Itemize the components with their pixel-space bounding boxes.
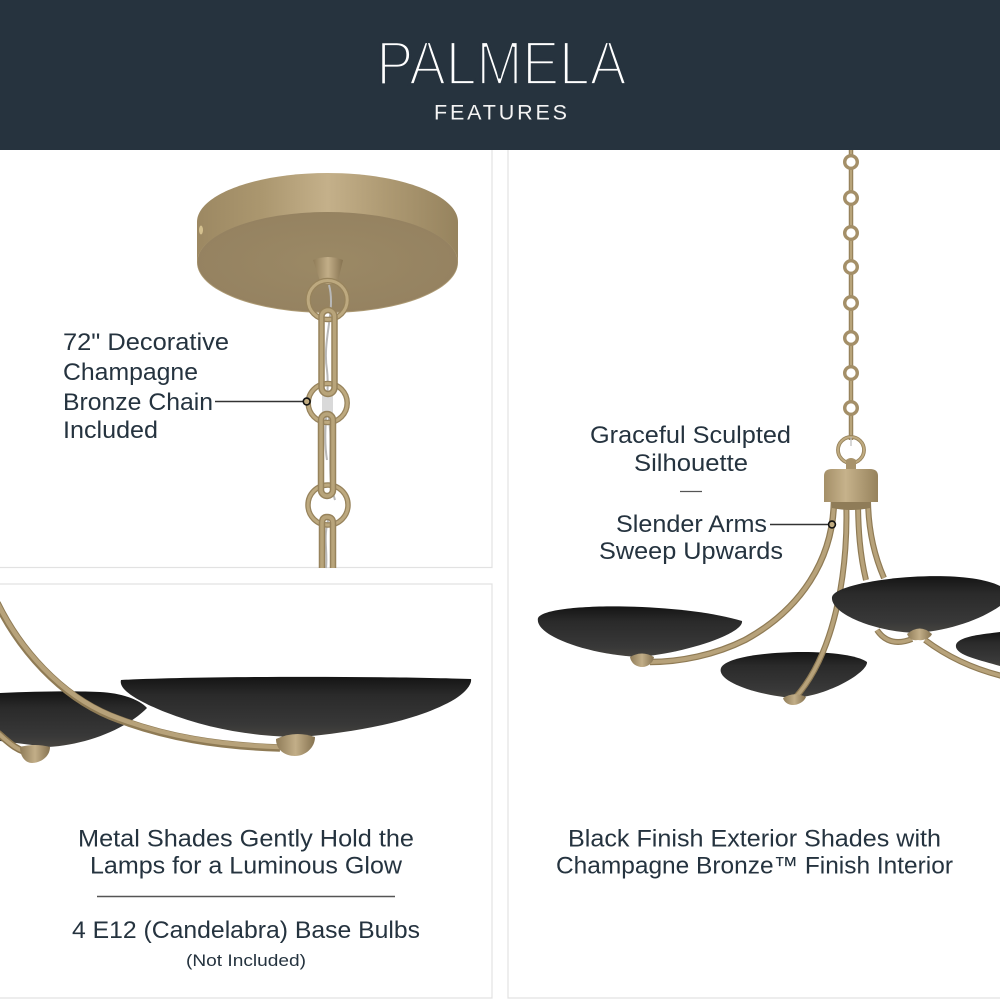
icon: back arms — [858, 498, 1000, 676]
icon: back shade — [0, 691, 147, 747]
icon: far right shade — [956, 632, 1000, 666]
text: arms callout: Slender Arms — [616, 511, 767, 538]
icon: front arm — [783, 498, 846, 705]
icon: left arm, shade and cup — [538, 498, 834, 667]
subtitle: FEATURES — [434, 100, 567, 124]
text: arms callout: Sweep Upwards — [599, 538, 783, 565]
text: silhouette callout: Graceful Sculpted — [590, 422, 791, 449]
text: bulb info: (Not Included) — [186, 951, 306, 970]
text: finish description — [556, 826, 953, 880]
text: chain callout: Champagne — [63, 359, 198, 386]
icon: hanging chain — [838, 150, 864, 463]
icon: front shade — [121, 677, 471, 737]
divider — [97, 896, 395, 898]
text: chain callout — [63, 329, 229, 444]
icon: ceiling canopy — [197, 173, 458, 313]
panel: shade detail — [0, 584, 492, 998]
text: shades description: Metal Shades Gently Hold the — [78, 826, 414, 852]
text: finish description: Champagne Bronze™ Finish Interior — [556, 852, 953, 880]
text: shades description: Lamps for a Luminous Glow — [90, 852, 403, 880]
text: silhouette callout — [590, 422, 791, 477]
text: chain callout: Included — [63, 417, 158, 444]
text: bulb info: 4 E12 (Candelabra) Base Bulbs — [72, 917, 420, 944]
icon: hub — [824, 458, 878, 510]
text: finish description: Black Finish Exterior Shades with — [568, 826, 941, 852]
dash separator — [680, 490, 702, 492]
icon: lower left arm and cup — [0, 733, 50, 763]
icon: chain links — [308, 280, 348, 568]
panel: full chandelier — [508, 150, 1000, 998]
icon: curved arm and cup — [0, 602, 315, 756]
panel: chain detail — [0, 150, 492, 568]
text: chain callout: 72" Decorative — [63, 329, 229, 356]
text: arms callout — [599, 511, 783, 565]
header banner — [0, 0, 1000, 150]
callout leader: chain — [215, 398, 310, 405]
text: silhouette callout: Silhouette — [634, 450, 748, 477]
callout leader: arms — [770, 521, 835, 528]
icon: right shade — [832, 576, 1000, 640]
icon: center shade — [721, 652, 867, 698]
text: shades description — [78, 826, 414, 880]
title: PALMELA — [376, 30, 627, 98]
text: chain callout: Bronze Chain — [63, 389, 213, 416]
text: bulb info — [72, 917, 420, 970]
